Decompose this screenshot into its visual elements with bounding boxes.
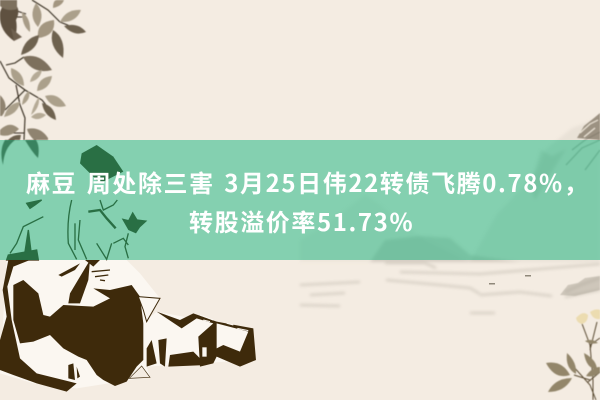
- title text: [26, 164, 589, 238]
- right hem outline: [157, 312, 256, 367]
- robe: [0, 260, 253, 388]
- branch with leaves at top left: [0, 0, 86, 165]
- green title band: [0, 140, 600, 260]
- seated figure: Zhou Chu style ink portrait: [0, 260, 256, 392]
- draped cloth corner: [138, 297, 160, 322]
- left robe edge: [0, 260, 77, 392]
- title text: 麻豆 周处除三害 3月25日伟22转债飞腾0.78%，: [26, 164, 589, 199]
- hand marks: [92, 270, 110, 281]
- figure body and flower linework: [7, 200, 147, 260]
- title text: 转股溢价率51.73%: [189, 203, 414, 238]
- leaves: [0, 0, 18, 41]
- rocky peak at upper right: [566, 113, 600, 170]
- lower folds: [68, 338, 167, 380]
- dark robe mass: [13, 280, 143, 386]
- boats: [489, 275, 531, 284]
- branch stems: [0, 0, 70, 140]
- raised sleeve strokes: [58, 260, 100, 303]
- small book: [129, 366, 150, 378]
- lake shoreline strokes: [300, 263, 600, 313]
- plant at bottom right: [546, 309, 600, 400]
- reed cluster: [560, 276, 600, 296]
- figure hat: [80, 145, 123, 183]
- distant mountains: [300, 118, 600, 262]
